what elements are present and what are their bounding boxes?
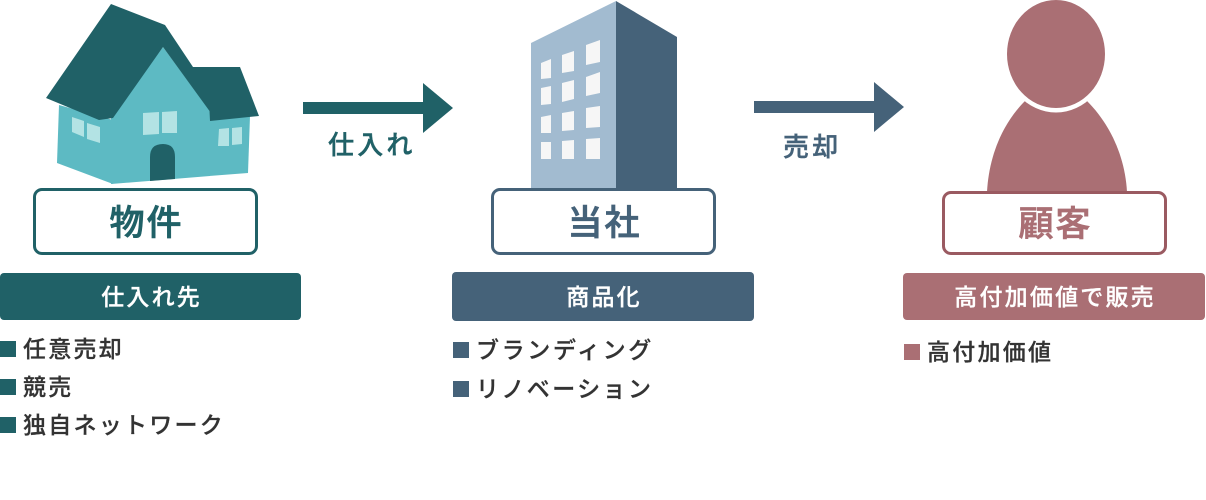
arrow: purchase: [303, 83, 453, 133]
list item: renovation: リノベーション: [476, 376, 653, 402]
icon: house: [46, 4, 259, 184]
heading box: property: 物件: [109, 204, 184, 243]
list item: added value: 高付加価値: [927, 339, 1053, 365]
heading box: our company: [491, 188, 716, 255]
heading box: our company: 当社: [567, 204, 642, 243]
heading box: property: [33, 188, 258, 255]
bar: suppliers: [0, 273, 301, 320]
label: purchase: 仕入れ: [328, 130, 416, 160]
list item: voluntary sale: 任意売却: [23, 336, 124, 362]
bar: productization: 商品化: [566, 284, 642, 310]
icon: office building: [531, 1, 677, 189]
list item: branding: ブランディング: [476, 337, 654, 363]
icon: customer person: [987, 0, 1127, 192]
bar: suppliers: 仕入れ先: [101, 284, 202, 310]
label: sale: 売却: [783, 132, 841, 162]
list item: own network: 独自ネットワーク: [23, 412, 225, 438]
list item: auction: [0, 374, 74, 400]
heading box: customer: [942, 191, 1167, 255]
list item: auction: 競売: [23, 374, 74, 400]
bar: high value sales: [903, 273, 1205, 320]
bar: productization: [452, 272, 754, 321]
bar: high value sales: 高付加価値で販売: [954, 284, 1156, 310]
heading box: customer: 顧客: [1018, 205, 1092, 244]
arrow: sale: [754, 82, 904, 132]
